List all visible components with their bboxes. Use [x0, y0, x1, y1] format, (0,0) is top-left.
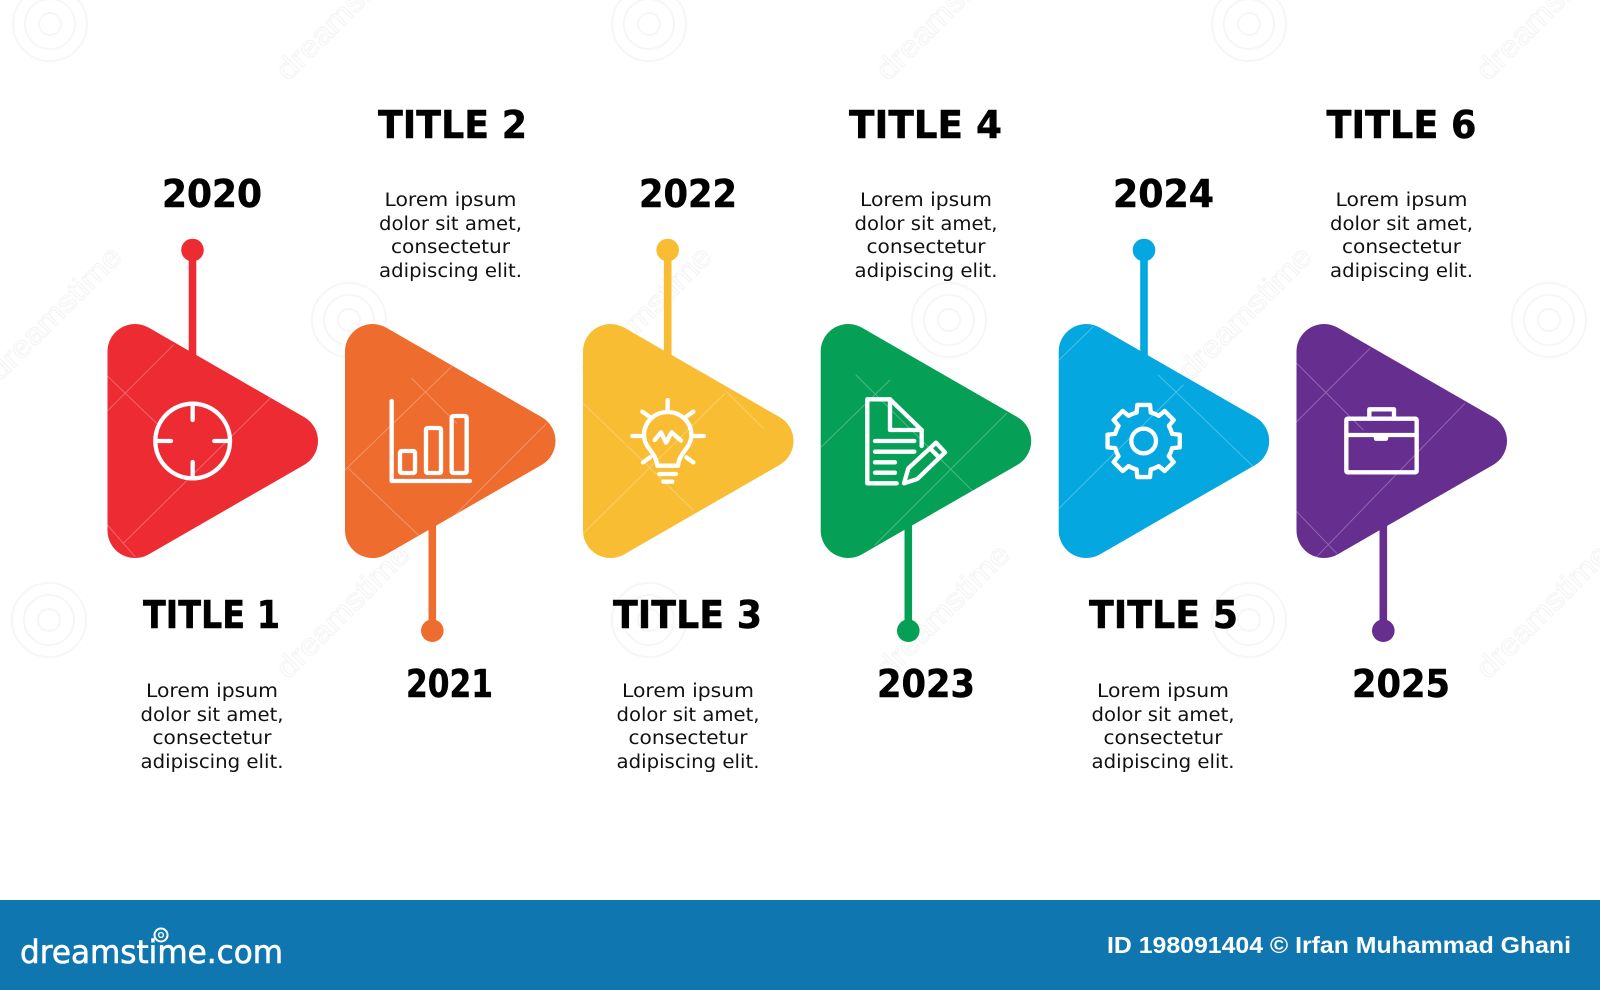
- body text: step 1: Lorem ipsum: [146, 681, 278, 702]
- body text: step 3: adipiscing elit.: [616, 752, 760, 773]
- year: 2024: 2024: [1113, 172, 1214, 216]
- body text: step 1: dolor sit amet,: [140, 705, 284, 726]
- icon: document and pencil: [822, 375, 1007, 545]
- panel: step 6, 2025: [1297, 103, 1480, 706]
- body text: step 4: dolor sit amet,: [854, 214, 998, 235]
- text: dreamstime: [572, 240, 719, 387]
- panel: step 4, 2023: [822, 103, 1007, 706]
- year: 2022: 2022: [639, 172, 737, 216]
- title: TITLE 6: TITLE 6: [1326, 103, 1476, 147]
- panel: step 5, 2024: [1059, 172, 1253, 773]
- title: TITLE 1: TITLE 1: [143, 593, 280, 637]
- text: dreamstime: [1172, 240, 1319, 387]
- body text: step 1: adipiscing elit.: [140, 752, 284, 773]
- body text: step 4: [854, 190, 998, 282]
- body text: step 3: dolor sit amet,: [616, 705, 760, 726]
- body text: step 3: Lorem ipsum: [622, 681, 754, 702]
- body text: step 4: adipiscing elit.: [854, 261, 998, 282]
- body text: step 6: consectetur: [1342, 237, 1461, 258]
- body text: step 6: Lorem ipsum: [1336, 190, 1468, 211]
- body text: step 4: Lorem ipsum: [860, 190, 992, 211]
- body text: step 3: consectetur: [628, 728, 748, 749]
- body text: step 2: Lorem ipsum: [384, 190, 516, 211]
- body text: step 5: [1092, 681, 1234, 773]
- body text: step 1: [140, 681, 284, 773]
- triangle: blue: [1086, 352, 1242, 530]
- body text: step 6: [1330, 190, 1473, 282]
- image credit: ID 198091404 © Irfan Muhammad Ghani: [1107, 932, 1571, 958]
- year: 2025: 2025: [1352, 662, 1450, 706]
- title: TITLE 2: TITLE 2: [378, 103, 527, 147]
- icon: gear: [1059, 327, 1253, 508]
- stem and dot: 2023: [897, 520, 920, 642]
- body text: step 5: adipiscing elit.: [1092, 752, 1234, 773]
- body text: step 1: consectetur: [152, 728, 272, 749]
- year: 2023: 2023: [877, 662, 975, 706]
- icon: target crosshair: [107, 345, 270, 557]
- body text: step 6: adipiscing elit.: [1330, 261, 1473, 282]
- panel: step 2, 2021: [345, 103, 547, 706]
- footer bar: [0, 900, 1600, 990]
- title: TITLE 5: TITLE 5: [1089, 593, 1238, 637]
- text: dreamstime: [270, 538, 417, 685]
- text: dreamstime: [870, 538, 1017, 685]
- stem and dot: 2021: [421, 520, 444, 642]
- text: dreamstime: [1470, 538, 1600, 685]
- title: TITLE 3: TITLE 3: [613, 593, 762, 637]
- triangle: red: [135, 352, 290, 530]
- stem and dot: 2022: [656, 239, 679, 362]
- icon: briefcase: [1297, 348, 1465, 557]
- triangle: green: [848, 352, 1004, 530]
- panel: step 3, 2022: [583, 172, 766, 773]
- icon: light bulb: [583, 390, 763, 533]
- triangle: purple: [1324, 352, 1480, 530]
- body text: step 5: Lorem ipsum: [1097, 681, 1229, 702]
- body text: step 6: dolor sit amet,: [1330, 214, 1473, 235]
- body text: step 4: consectetur: [866, 237, 986, 258]
- body text: step 2: adipiscing elit.: [379, 261, 522, 282]
- stem and dot: 2020: [181, 239, 204, 362]
- body text: step 2: dolor sit amet,: [379, 214, 522, 235]
- stem and dot: 2025: [1372, 520, 1395, 642]
- panel: step 1, 2020: [107, 172, 290, 773]
- body text: step 2: consectetur: [391, 237, 510, 258]
- icon: bar chart: [345, 367, 547, 535]
- triangle: orange: [372, 352, 528, 530]
- year: 2021: 2021: [406, 662, 493, 706]
- title: TITLE 4: TITLE 4: [849, 103, 1002, 147]
- body text: step 3: [616, 681, 760, 773]
- body text: step 5: consectetur: [1104, 728, 1223, 749]
- year: 2020: 2020: [162, 172, 262, 216]
- logo: dreamstime.com: dreamstime.com: [20, 933, 283, 971]
- body text: step 5: dolor sit amet,: [1092, 705, 1234, 726]
- stem and dot: 2024: [1133, 239, 1155, 362]
- body text: step 2: [379, 190, 522, 282]
- triangle: yellow: [610, 352, 766, 530]
